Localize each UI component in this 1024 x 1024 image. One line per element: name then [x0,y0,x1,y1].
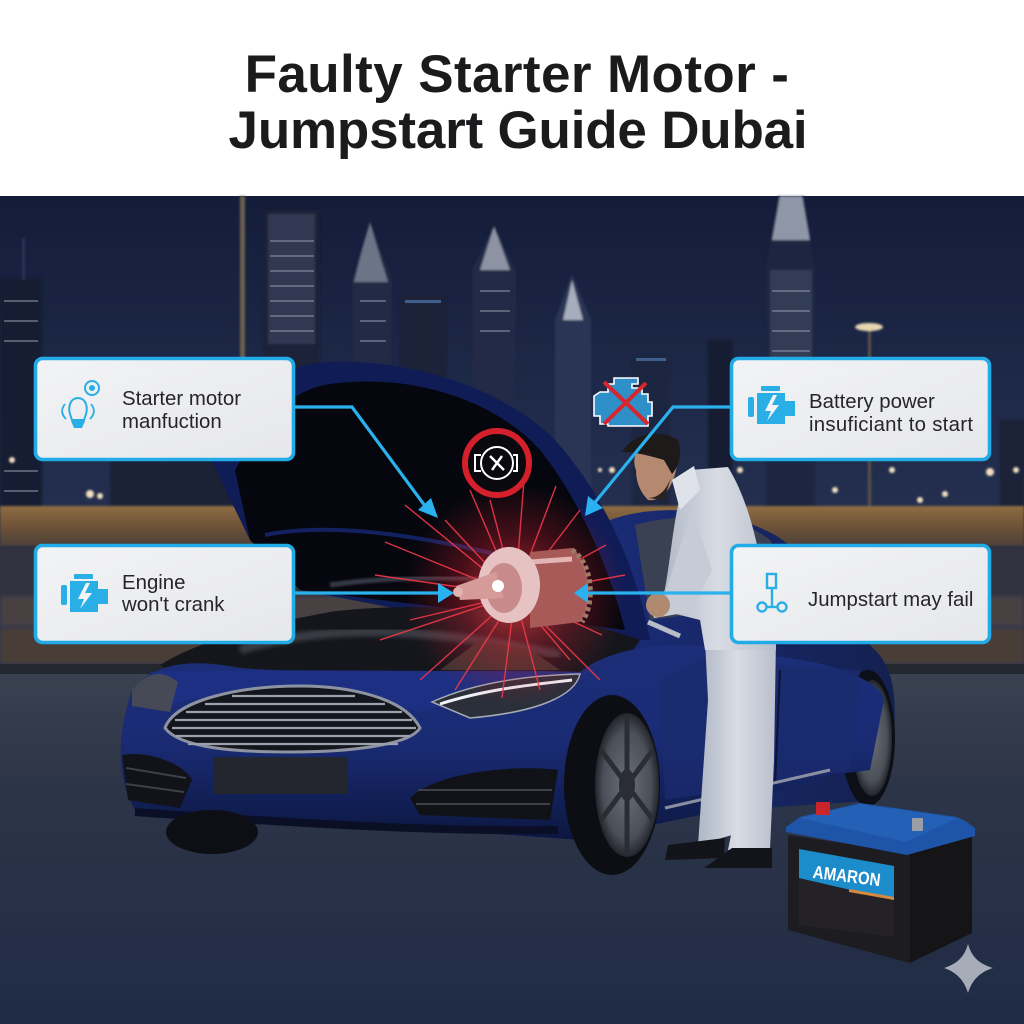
night skyline background [0,196,1024,696]
text: starter motor: Starter motor [122,388,241,410]
title: Jumpstart Guide Dubai [229,101,807,160]
icon: engine with bolt [61,574,108,612]
panel: battery power insufficient [732,358,990,460]
battery: AMARON [812,862,882,890]
panel: engine won't crank [36,546,294,642]
car [121,362,895,875]
text: battery power: insuficiant to start [809,414,973,436]
asphalt ground [0,674,1024,1024]
starter motor with red sparks [375,480,625,705]
text: engine crank: won't crank [121,594,225,616]
text: jumpstart: Jumpstart may fail [808,589,973,611]
panel: starter motor malfunction [36,358,294,460]
panel: jumpstart may fail [732,546,990,642]
icon: crossed out engine [594,378,652,426]
icon: engine warning in red ring [465,431,529,495]
icon: light bulb [62,381,99,428]
mechanic [622,434,776,868]
text: battery power: Battery power [809,391,935,413]
battery [786,802,975,963]
text: engine crank: Engine [122,572,186,594]
sparkle watermark [944,944,993,993]
icon: engine with bolt [748,386,795,424]
text: starter motor: manfuction [122,411,222,433]
icon: jumpstart plug [758,574,786,612]
title: Faulty Starter Motor - [245,45,789,104]
connector arrows [295,407,731,603]
title [229,45,807,160]
